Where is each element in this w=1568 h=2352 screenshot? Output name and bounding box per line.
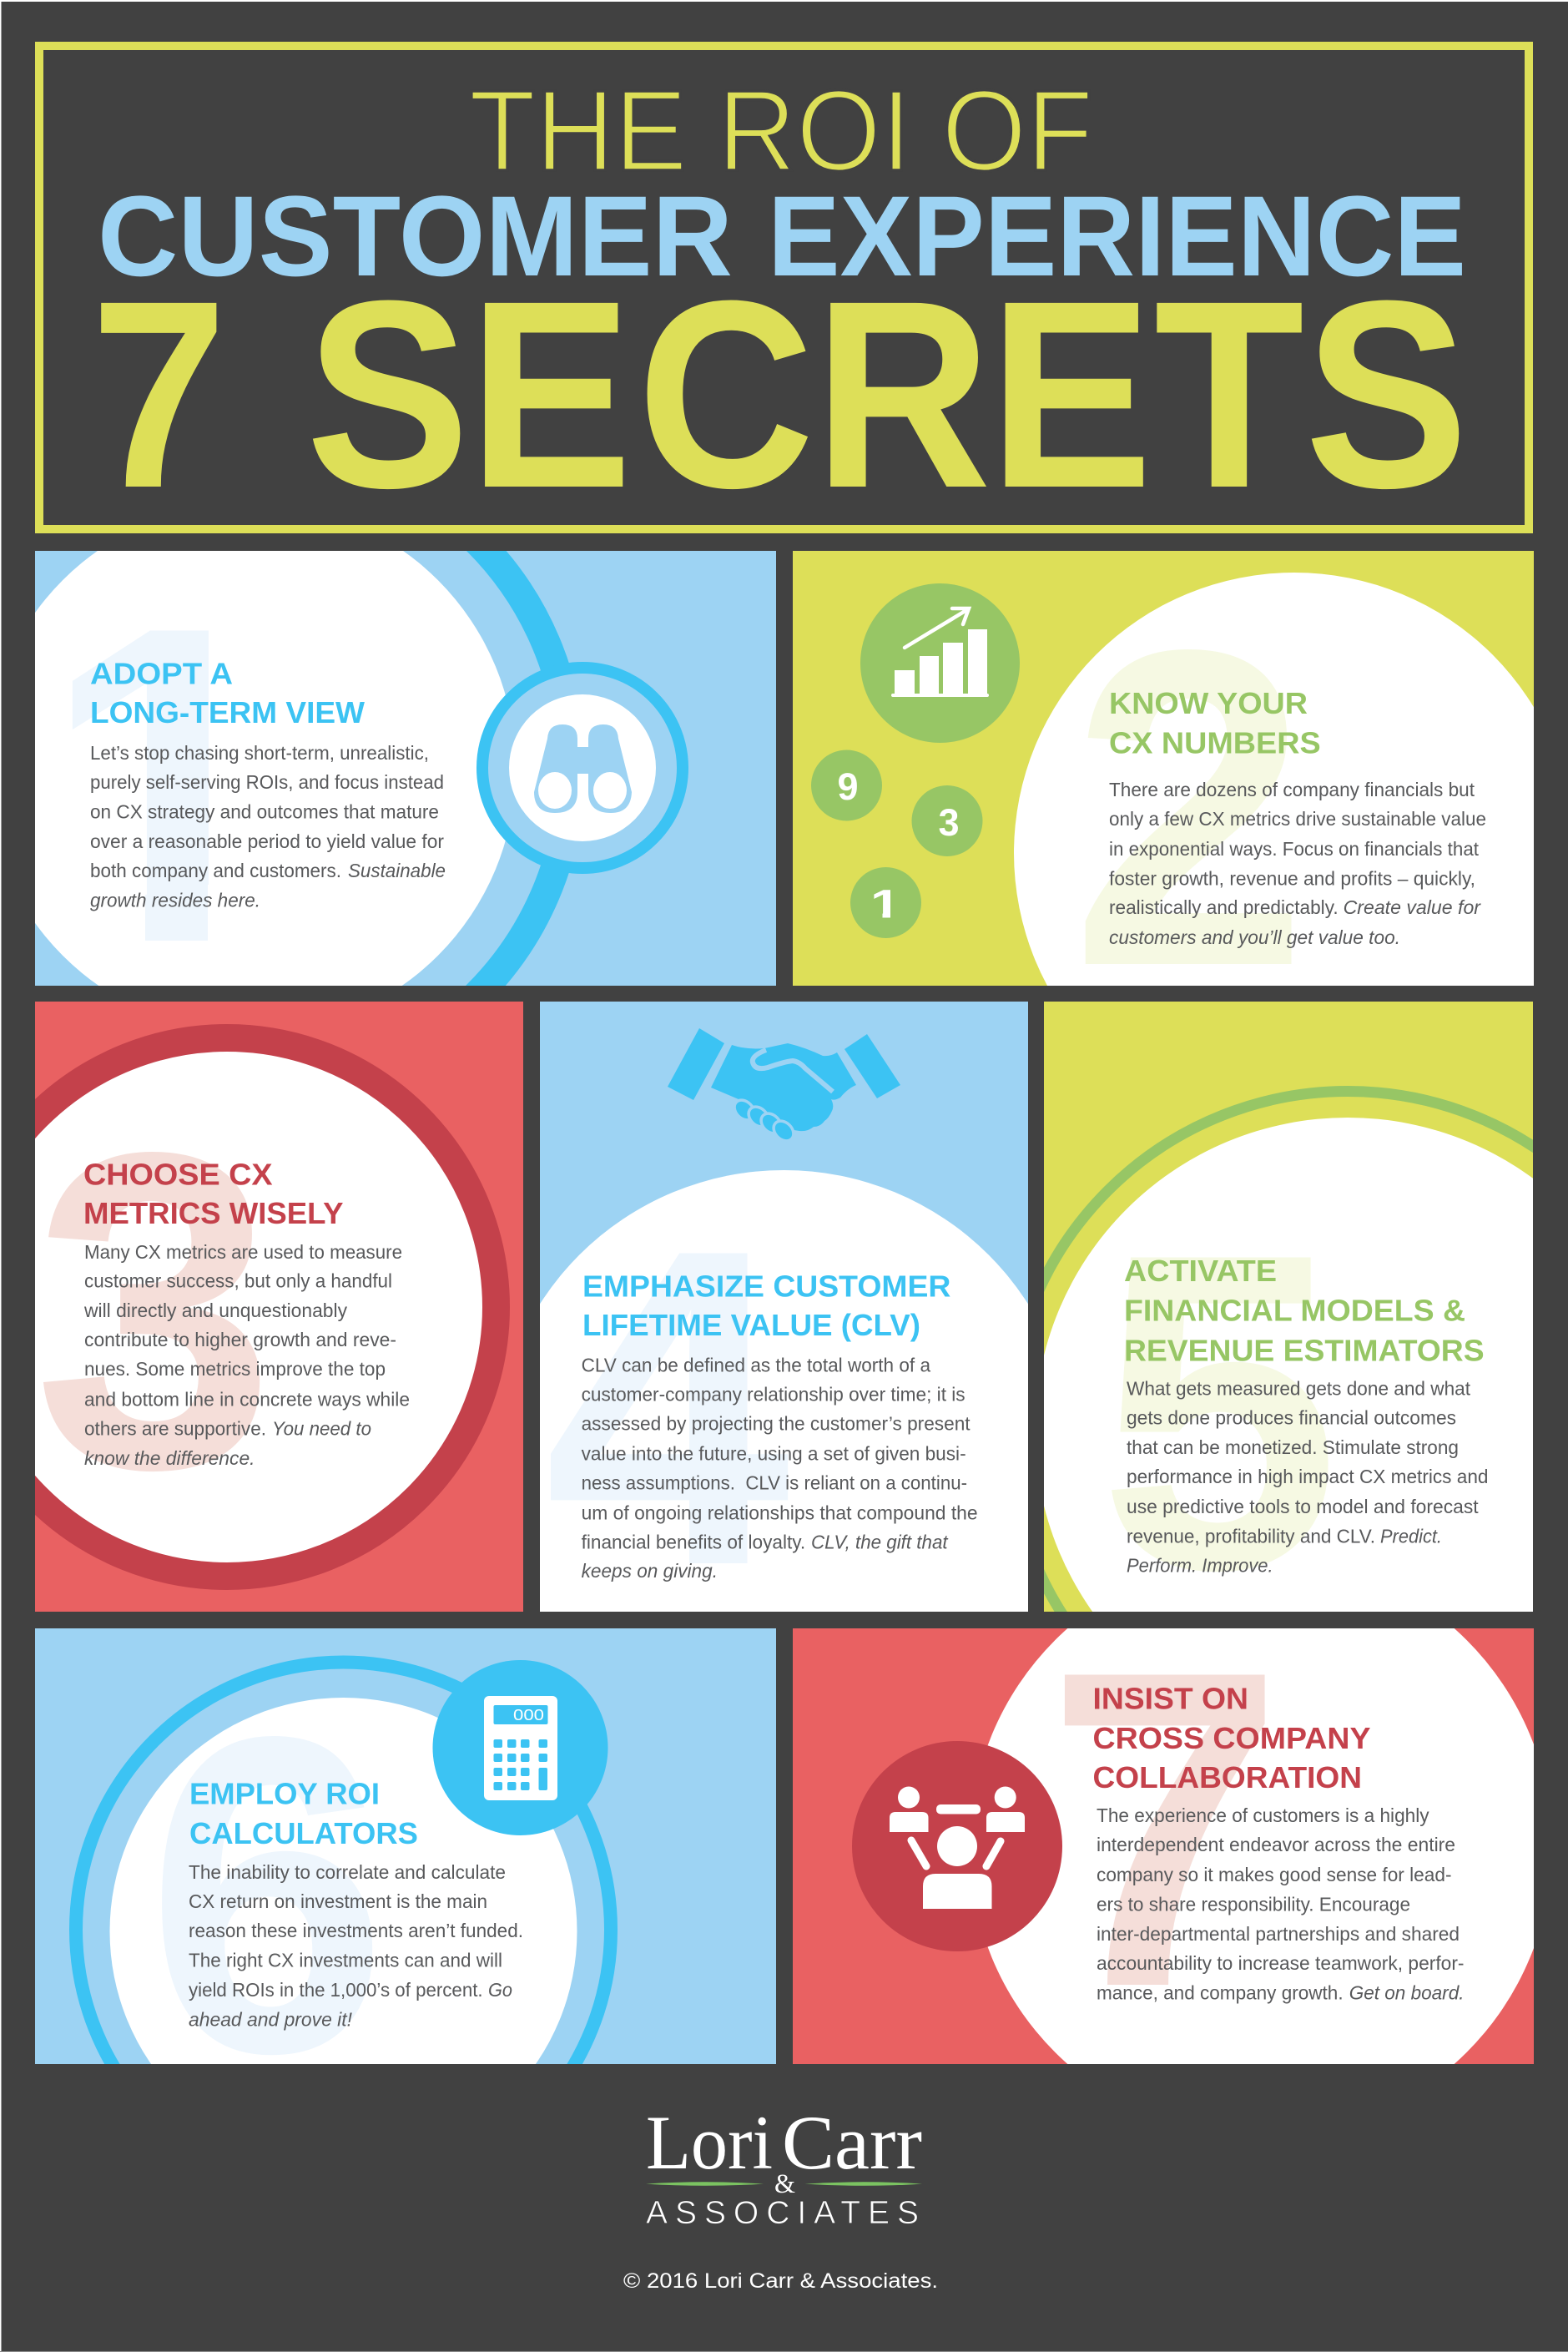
body text: and bottom line in concrete ways while xyxy=(84,1389,410,1411)
watermark numeral 4: 4 xyxy=(544,1156,793,1659)
heading: ACTIVATE xyxy=(1124,1254,1277,1288)
body text: purely self-serving ROIs, and focus instead xyxy=(90,771,444,793)
body text xyxy=(90,742,446,911)
title word: Experience: EXPERIENCE xyxy=(768,173,1466,300)
heading: LIFETIME VALUE (CLV) xyxy=(582,1308,920,1342)
body text xyxy=(1097,1804,1464,2004)
heading xyxy=(582,1269,950,1342)
body text: Many CX metrics are used to measure xyxy=(84,1241,402,1263)
body text: foster growth, revenue and profits – quickly, xyxy=(1109,868,1475,890)
body text xyxy=(1109,779,1486,948)
heading: CROSS COMPANY xyxy=(1093,1721,1370,1755)
body text: The inability to correlate and calculate xyxy=(189,1861,506,1883)
icon: calculator xyxy=(432,1660,608,1835)
body text: ahead and prove it! xyxy=(189,2009,353,2031)
heading xyxy=(190,1783,417,1845)
heading: EMPHASIZE CUSTOMER xyxy=(582,1269,950,1304)
body text: revenue, profitability and CLV. xyxy=(1127,1526,1375,1547)
title line: The ROI of: THE ROI OF xyxy=(469,67,1093,195)
body text: know the difference. xyxy=(84,1447,255,1469)
icon: binoculars xyxy=(482,668,683,868)
heading: ADOPT A xyxy=(90,656,233,691)
body text: keeps on giving. xyxy=(582,1560,718,1582)
heading: INSIST ON xyxy=(1093,1681,1248,1716)
body text: um of ongoing relationships that compound the xyxy=(582,1502,978,1523)
icon: team collaboration xyxy=(852,1741,1062,1951)
heading: CHOOSE CX xyxy=(83,1158,273,1192)
body text: only a few CX metrics drive sustainable value xyxy=(1109,808,1486,830)
watermark numeral 6: 6 xyxy=(146,1643,388,2147)
title word: Customer: CUSTOMER xyxy=(98,173,733,300)
heading: KNOW YOUR xyxy=(1109,686,1308,720)
heading: CALCULATORS xyxy=(189,1816,418,1850)
panel 5: activate financial models xyxy=(1044,1002,1533,1612)
body text: What gets measured gets done and what xyxy=(1127,1378,1471,1400)
body text: over a reasonable period to yield value for xyxy=(90,830,444,852)
body text: mance, and company growth. xyxy=(1097,1982,1344,2004)
body text: Let’s stop chasing short-term, unrealistic, xyxy=(90,742,429,764)
panel 3: choose cx metrics wisely xyxy=(0,1002,523,1612)
icon: growth chart xyxy=(860,583,1020,743)
body text: CX return on investment is the main xyxy=(189,1890,487,1912)
body text: yield ROIs in the 1,000’s of percent. xyxy=(189,1979,483,2001)
heading: FINANCIAL MODELS & xyxy=(1124,1294,1465,1328)
body text: gets done produces financial outcomes xyxy=(1127,1407,1456,1429)
logo: Lori Carr and Associates xyxy=(646,2100,922,2231)
body text: assessed by projecting the customer’s present xyxy=(582,1413,971,1435)
icon: number 3: 3 xyxy=(938,801,960,844)
body text xyxy=(582,1354,978,1582)
body text: customer-company relationship over time; it is xyxy=(582,1383,966,1405)
watermark numeral 5: 5 xyxy=(1098,1160,1340,1663)
panel 6: employ roi calculators xyxy=(35,1628,776,2064)
logo: Lori Carr and Associates: & xyxy=(774,2169,795,2199)
body text: interdependent endeavor across the entire xyxy=(1097,1834,1455,1855)
heading xyxy=(1110,693,1320,754)
body text: performance in high impact CX metrics and xyxy=(1127,1466,1489,1487)
body text: inter-departmental partnerships and shared xyxy=(1097,1923,1460,1945)
body text: Get on board. xyxy=(1349,1982,1464,2004)
logo: Lori Carr and Associates: ASSOCIATES xyxy=(646,2195,919,2231)
body text: accountability to increase teamwork, perfor- xyxy=(1097,1952,1464,1974)
icon: handshake xyxy=(668,1028,900,1145)
icon: number 1: 1 xyxy=(870,883,900,926)
body text xyxy=(83,1241,410,1469)
icon: number 9: 9 xyxy=(837,765,859,808)
copyright: © 2016 Lori Carr & Associates. xyxy=(623,2269,938,2293)
body text: customers and you’ll get value too. xyxy=(1109,926,1400,948)
icon: number 1 xyxy=(850,867,921,938)
body text: ers to share responsibility. Encourage xyxy=(1097,1894,1410,1915)
body text: customer success, but only a handful xyxy=(84,1270,392,1292)
icon: number 3 xyxy=(911,785,983,856)
heading xyxy=(1125,1260,1484,1361)
body text: Go xyxy=(488,1979,512,2001)
body text: on CX strategy and outcomes that mature xyxy=(90,801,439,823)
panel 1: adopt a long-term view xyxy=(35,551,776,986)
watermark numeral 3: 3 xyxy=(33,1059,275,1562)
body text: financial benefits of loyalty. xyxy=(582,1531,805,1552)
heading: COLLABORATION xyxy=(1093,1760,1362,1794)
heading xyxy=(91,663,365,723)
panel 2: know your cx numbers xyxy=(793,551,1534,986)
watermark numeral 1: 1 xyxy=(42,533,292,1037)
body text xyxy=(1127,1378,1489,1576)
panel 4: emphasize customer lifetime value xyxy=(540,1002,1028,1612)
body text: both company and customers. xyxy=(90,860,341,881)
body text: The right CX investments can and will xyxy=(189,1950,502,1971)
logo: Lori Carr and Associates: Carr xyxy=(782,2100,922,2185)
body text: CLV, the gift that xyxy=(811,1531,949,1552)
body text: Create value for xyxy=(1344,896,1481,918)
body text: Sustainable xyxy=(348,860,446,881)
body text: use predictive tools to model and forecast xyxy=(1127,1496,1479,1517)
body text: realistically and predictably. xyxy=(1109,896,1339,918)
icon: calculator: 000 xyxy=(513,1707,544,1724)
heading: METRICS WISELY xyxy=(83,1196,344,1230)
title line: 7 Secrets: 7 SECRETS xyxy=(91,246,1469,544)
body text: Predict. xyxy=(1380,1526,1442,1547)
body text: others are supportive. xyxy=(84,1417,266,1439)
body text: contribute to higher growth and reve- xyxy=(84,1329,396,1350)
body text: growth resides here. xyxy=(90,890,260,911)
heading xyxy=(85,1163,343,1224)
body text: CLV can be defined as the total worth of a xyxy=(582,1354,930,1375)
heading: LONG-TERM VIEW xyxy=(90,695,365,729)
body text xyxy=(189,1861,523,2031)
logo: Lori Carr and Associates: Lori xyxy=(646,2100,773,2185)
body text: The experience of customers is a highly xyxy=(1097,1804,1429,1826)
heading: REVENUE ESTIMATORS xyxy=(1124,1334,1485,1367)
body text: ness assumptions. CLV is reliant on a continu- xyxy=(582,1472,967,1494)
title frame xyxy=(39,46,1529,529)
body text: There are dozens of company financials but xyxy=(1109,779,1475,800)
heading xyxy=(1094,1688,1370,1788)
icon: number 9 xyxy=(811,750,882,821)
body text: that can be monetized. Stimulate strong xyxy=(1127,1436,1459,1458)
watermark numeral 2: 2 xyxy=(1071,557,1308,1060)
body text: company so it makes good sense for lead- xyxy=(1097,1864,1452,1885)
body text: nues. Some metrics improve the top xyxy=(84,1358,386,1380)
body text: will directly and unquestionably xyxy=(83,1300,347,1321)
body text: value into the future, using a set of given busi- xyxy=(582,1443,966,1465)
body text: in exponential ways. Focus on financials that xyxy=(1109,838,1480,860)
body text: reason these investments aren’t funded. xyxy=(189,1920,523,1941)
heading: EMPLOY ROI xyxy=(189,1776,380,1811)
body text: Perform. Improve. xyxy=(1127,1554,1273,1576)
body text: You need to xyxy=(272,1417,371,1439)
watermark numeral 7: 7 xyxy=(1046,1577,1283,2081)
panel 7: insist on cross company collaboration xyxy=(793,1628,1534,2064)
title xyxy=(91,67,1469,544)
heading: CX NUMBERS xyxy=(1109,726,1321,760)
